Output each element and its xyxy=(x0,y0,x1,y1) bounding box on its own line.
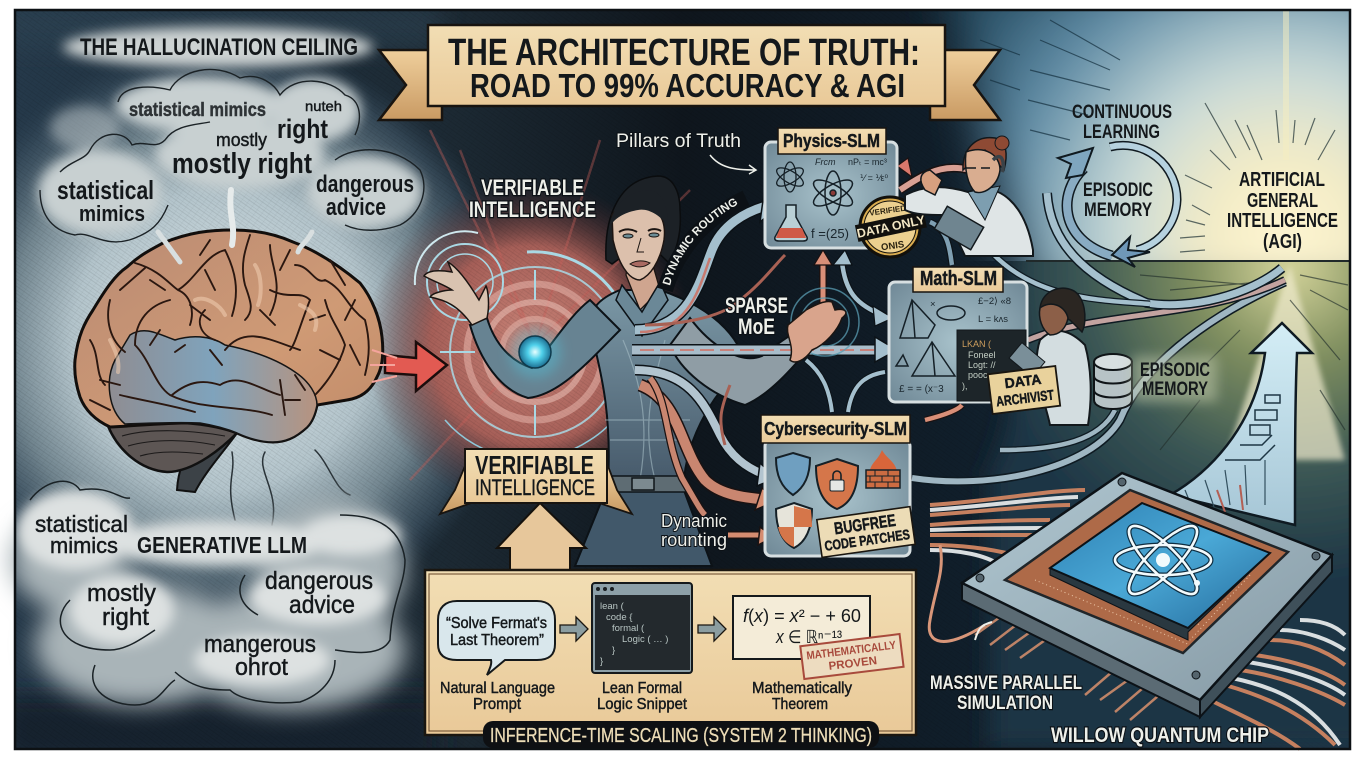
banner: verifiable intelligence xyxy=(440,449,632,514)
label: artificial general intelligence xyxy=(1227,169,1338,253)
label: sparse MoE: MoE xyxy=(738,314,775,339)
step captions: Prompt xyxy=(473,696,522,713)
arrow: code to theorem xyxy=(698,617,726,641)
code terminal: lean ( xyxy=(600,601,625,612)
formula scribbles: f =(25) xyxy=(811,226,849,241)
label: Cybersecurity-SLM xyxy=(761,415,910,443)
panel: inference-time scaling xyxy=(425,570,916,748)
code terminal: code { xyxy=(606,612,632,623)
label: Physics-SLM xyxy=(778,128,886,154)
copper recess xyxy=(1005,490,1288,653)
cerebellum and stem xyxy=(108,422,237,492)
label: Cybersecurity-SLM: Cybersecurity-SLM xyxy=(764,419,907,439)
label: massive parallel simulation: MASSIVE PARALLEL xyxy=(930,673,1082,694)
step captions xyxy=(440,680,852,713)
cloud masses xyxy=(10,481,405,710)
figure: physicist scientist xyxy=(905,136,1033,256)
code terminal: Logic ( … ) xyxy=(622,634,668,645)
right hand xyxy=(787,302,846,362)
label: dynamic rounting: rounting xyxy=(661,530,727,550)
arrow: up from inference panel to banner xyxy=(497,503,586,575)
stamp: verified data only: ONIS xyxy=(880,239,905,253)
panel: Cybersecurity-SLM xyxy=(765,440,910,556)
ceiling label xyxy=(63,27,373,67)
stamp: verified data only xyxy=(855,197,927,257)
code terminal: ), xyxy=(962,381,968,391)
title banner xyxy=(379,25,1000,120)
chip plate xyxy=(962,473,1332,700)
speech bubble: prompt: “Solve Fermat's xyxy=(446,615,547,632)
label: massive parallel simulation: SIMULATION xyxy=(957,693,1053,714)
math scribbles: × xyxy=(930,299,936,310)
wisps rising from brain xyxy=(158,190,350,525)
cloud words: right xyxy=(102,604,149,631)
cloud words: mimics xyxy=(50,533,118,558)
theorem card: x ∈ ℝⁿ⁻¹³ xyxy=(775,627,842,647)
cloud words: advice xyxy=(326,194,386,221)
icon: firewall xyxy=(866,450,900,488)
salmon flows xyxy=(640,255,785,545)
hair fringe xyxy=(610,190,668,226)
label: dynamic rounting xyxy=(661,511,727,550)
icon: episodic memory database xyxy=(1094,354,1132,409)
central flow to math xyxy=(632,337,897,362)
panel: Math-SLM xyxy=(889,282,1027,402)
code terminal xyxy=(957,330,1026,401)
label: episodic memory (cycle) xyxy=(1083,180,1153,221)
title text xyxy=(448,32,920,104)
stamp: verified data only: VERIFIED xyxy=(869,204,907,218)
brain folds xyxy=(90,235,369,415)
cloud words: statistical xyxy=(35,511,128,537)
hub orb xyxy=(509,326,561,378)
icon: pyramids xyxy=(896,300,965,376)
brain highlights xyxy=(110,265,316,372)
cloud words: dangerous xyxy=(265,567,373,595)
arrows between pillars xyxy=(806,158,985,420)
mounting screws xyxy=(976,478,1320,679)
collar and neck xyxy=(626,262,660,310)
code terminal xyxy=(592,583,692,673)
label: Math-SLM: Math-SLM xyxy=(920,268,997,290)
label: continuous learning: CONTINUOUS xyxy=(1072,102,1172,123)
code terminal: LKAN ( xyxy=(962,339,991,349)
cloud words: dangerous xyxy=(316,171,414,198)
cloud group: generative LLM clouds xyxy=(10,481,405,710)
stamp: verified data only: DATA ONLY xyxy=(856,213,927,241)
cloud group: top hallucination clouds xyxy=(38,27,424,242)
flow to physics xyxy=(635,193,780,332)
label: Physics-SLM: Physics-SLM xyxy=(783,131,880,151)
label: episodic memory (cycle): MEMORY xyxy=(1084,200,1152,221)
icon: Willow quantum chip xyxy=(962,473,1332,717)
banner: verifiable intelligence: INTELLIGENCE xyxy=(475,475,595,500)
label: episodic memory (database): EPISODIC xyxy=(1140,360,1210,381)
label: verifiable intelligence (upper) xyxy=(469,175,596,222)
cloud words: mangerous xyxy=(204,631,316,658)
horizon line xyxy=(1026,260,1350,262)
left hand xyxy=(424,262,489,325)
label: pillars of truth: Pillars of Truth xyxy=(616,131,741,152)
code terminal: } xyxy=(600,656,603,667)
label: verifiable intelligence (upper): INTELLIGENCE xyxy=(469,197,596,222)
icon: large atom xyxy=(810,171,856,215)
figure: central woman xyxy=(424,176,812,566)
arrows: cycle of continuous learning xyxy=(1058,145,1177,267)
cerebrum xyxy=(75,230,383,442)
label: episodic memory (database) xyxy=(1132,356,1217,402)
cloud words: ohrot xyxy=(235,654,288,681)
cloud words: GENERATIVE LLM xyxy=(137,532,307,558)
icon: small atom xyxy=(774,162,806,192)
right arm xyxy=(670,318,812,405)
cloud words xyxy=(57,98,414,226)
icon: quartered shield xyxy=(776,503,812,548)
label: dynamic rounting: Dynamic xyxy=(661,511,727,531)
banner tails xyxy=(379,50,1000,120)
math scribbles: £−2⟩ «8 xyxy=(978,296,1011,307)
step captions: Natural Language xyxy=(440,680,555,697)
step captions: Logic Snippet xyxy=(597,696,688,713)
hair xyxy=(606,176,680,264)
label: continuous learning: LEARNING xyxy=(1083,122,1160,143)
formula scribbles: ⅟ = ⅟ε⁰ xyxy=(860,173,888,183)
formula scribbles: nPₜ = mc³ xyxy=(848,157,887,167)
panel: Physics-SLM xyxy=(765,142,897,248)
cloud words: nuteh xyxy=(305,98,342,114)
title text: THE ARCHITECTURE OF TRUTH: xyxy=(448,32,920,74)
wiring bundles around the chip xyxy=(929,490,1345,749)
banner: verifiable intelligence: VERIFIABLE xyxy=(475,450,594,480)
cloud words: mostly right xyxy=(172,148,312,180)
bluish temporal lobe xyxy=(109,331,317,442)
label: continuous learning xyxy=(1072,102,1172,143)
label: pillars of truth xyxy=(616,131,756,174)
icon: blue shield xyxy=(776,453,810,495)
figure: data archivist scientist xyxy=(1009,288,1091,425)
tag: data archivist xyxy=(988,366,1060,414)
cloud words xyxy=(35,511,373,681)
tag: bugfree code patches xyxy=(817,507,915,557)
cloud words: statistical mimics xyxy=(129,100,266,121)
icon: flask xyxy=(775,205,807,241)
sun rays around AGI xyxy=(1180,103,1335,252)
label: Willow quantum chip: WILLOW QUANTUM CHIP xyxy=(1051,724,1269,747)
label: artificial general intelligence: GENERAL xyxy=(1247,190,1318,212)
cloud words: advice xyxy=(289,591,355,619)
code terminal: Foneel xyxy=(968,350,996,360)
arrow: prompt to code xyxy=(560,617,588,641)
arrows: flows converging to AGI xyxy=(912,193,1285,481)
label: dynamic routing: DYNAMIC ROUTING xyxy=(662,198,738,286)
cloud words: mostly xyxy=(216,130,267,150)
face xyxy=(612,205,664,280)
arrows: dynamic routing flows xyxy=(632,158,985,545)
arrow: brain to hub xyxy=(370,342,447,391)
step captions: Theorem xyxy=(772,696,828,713)
speech bubble: prompt: Last Theorem” xyxy=(450,632,544,649)
code terminal: Logt: // xyxy=(968,360,996,370)
label: episodic memory (database): MEMORY xyxy=(1142,379,1208,400)
tag: bugfree code patches: CODE PATCHES xyxy=(823,526,911,554)
region: AGI sky xyxy=(926,11,1349,261)
caption bar: INFERENCE-TIME SCALING (SYSTEM 2 THINKING) xyxy=(490,725,872,747)
math scribbles xyxy=(899,296,1011,395)
blue die xyxy=(1050,505,1270,640)
label: episodic memory (cycle): EPISODIC xyxy=(1083,180,1153,201)
banner body xyxy=(428,25,945,106)
math scribbles: L = kʌs xyxy=(978,314,1008,325)
caption bar xyxy=(483,721,879,748)
theorem card: f(x) = x² − + 60 xyxy=(743,606,861,626)
step captions: Lean Formal xyxy=(602,680,682,697)
region: red glow behind the hub xyxy=(365,130,695,510)
label: artificial general intelligence: ARTIFICIAL xyxy=(1239,169,1325,191)
title text: ROAD TO 99% ACCURACY & AGI xyxy=(470,67,905,104)
code terminal: pooc xyxy=(968,370,988,380)
atom logo xyxy=(1115,518,1211,602)
swirl ring near right hand xyxy=(791,288,859,356)
flow to cyber xyxy=(635,370,776,486)
light beam above AGI xyxy=(1283,10,1289,160)
code terminal: formal ( xyxy=(612,623,645,634)
tag: data archivist: ARCHIVIST xyxy=(995,386,1055,409)
region: hallucination smoke backdrop xyxy=(16,12,480,748)
region: AGI ground xyxy=(984,261,1349,748)
cloud puffs xyxy=(38,69,424,242)
stamp: mathematically proven xyxy=(800,634,904,679)
formula scribbles xyxy=(811,157,888,241)
chip sides xyxy=(962,583,1200,717)
torso xyxy=(590,290,745,485)
theorem card xyxy=(733,596,870,659)
icon: lock shield xyxy=(816,459,858,509)
cloud words: right xyxy=(277,114,328,144)
belt xyxy=(606,476,686,492)
label: sparse MoE xyxy=(725,293,788,339)
stamp: mathematically proven: MATHEMATICALLY xyxy=(806,640,897,662)
icon: brain xyxy=(75,230,383,492)
arrow: quantum chip up to AGI xyxy=(1170,323,1312,525)
label: verifiable intelligence (upper): VERIFIABLE xyxy=(481,175,584,200)
label: massive parallel simulation xyxy=(930,673,1082,714)
facial features xyxy=(619,229,661,267)
tag: data archivist: DATA xyxy=(1004,371,1042,391)
left arm xyxy=(470,300,620,398)
cloud words: statistical xyxy=(57,175,154,205)
code terminal: } xyxy=(612,645,615,656)
ceiling label: THE HALLUCINATION CEILING xyxy=(80,34,358,61)
tag: bugfree code patches: BUGFREE xyxy=(833,511,897,538)
math scribbles: £ = = (x⁻3 xyxy=(899,384,944,395)
step captions: Mathematically xyxy=(752,680,852,697)
chart: HUD rings xyxy=(415,231,639,459)
label: artificial general intelligence: (AGI) xyxy=(1263,231,1302,253)
cloud words: mimics xyxy=(79,201,145,226)
stamp: mathematically proven: PROVEN xyxy=(828,655,878,673)
legs xyxy=(575,485,712,566)
label: sparse MoE: SPARSE xyxy=(725,293,788,318)
cloud words: mostly xyxy=(87,580,156,607)
formula scribbles: Frcm xyxy=(815,157,836,167)
speech bubble: prompt xyxy=(438,601,555,675)
